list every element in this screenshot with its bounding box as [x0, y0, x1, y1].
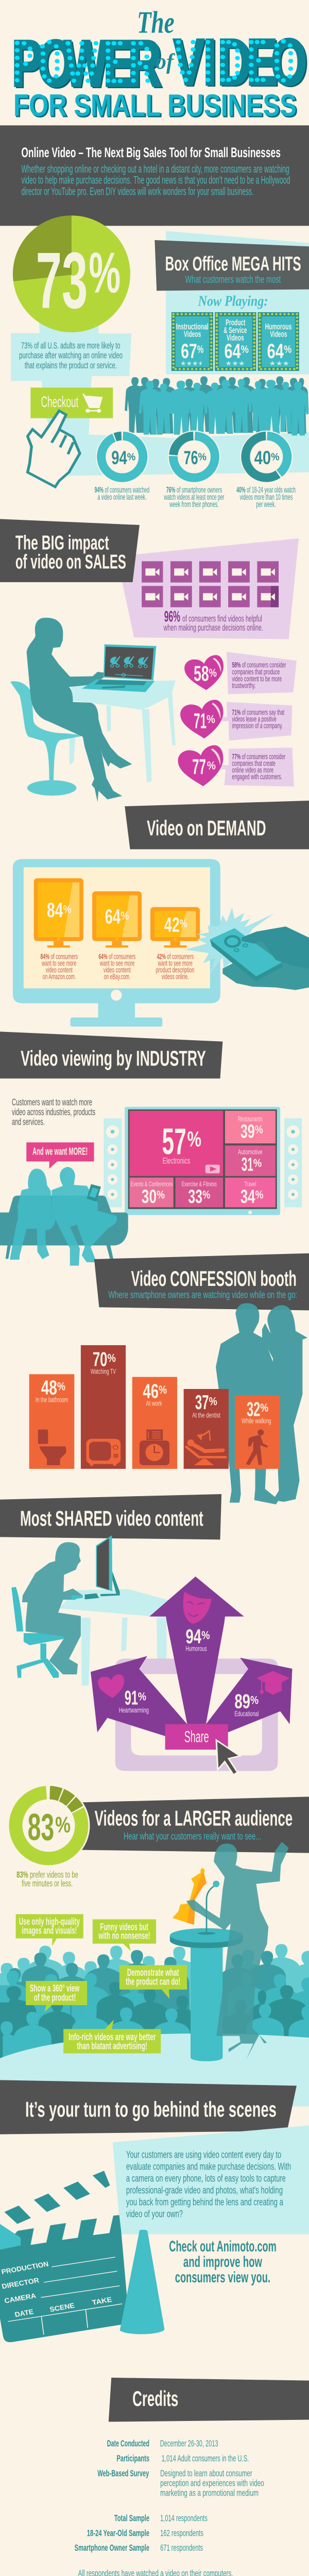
- illustration: hand holding remote: [210, 926, 309, 990]
- illustration: desktop monitor: [71, 1535, 120, 1599]
- chart: 94 percent donut: %: [127, 451, 135, 463]
- text: screen captions: 42% of consumers: [157, 953, 194, 961]
- title: The: The: [137, 5, 175, 39]
- cell: events 30 percent: 30: [142, 1186, 157, 1207]
- section: 73 percent and box office: [11, 215, 309, 487]
- heading: video confession booth: [94, 1253, 309, 1310]
- heading: the big impact: The BIG impact: [15, 531, 109, 554]
- callout: demonstrate product: the product can do!: [126, 1976, 180, 1987]
- button: share: [165, 1724, 228, 1750]
- chart: 42 percent screen: 42: [164, 913, 180, 937]
- icon: pixel hand pointer: [28, 411, 80, 487]
- illustration: woman silhouette: [27, 618, 132, 802]
- illustration: chair: [10, 681, 83, 795]
- icon: walking person: [246, 1429, 268, 1465]
- text: donut captions: 76% of smartphone owners: [166, 486, 222, 495]
- section: most shared: [0, 1494, 221, 1686]
- heading: credits: Credits: [132, 2386, 178, 2411]
- illustration: woman with award: [186, 1842, 289, 2059]
- section: trust hearts and video on demand: [13, 700, 309, 1027]
- chart: bar 32 percent while walking: [235, 1396, 280, 1469]
- chart: 64 percent screen: [92, 891, 142, 947]
- illustration: film clapperboard: TAKE: [91, 2296, 113, 2307]
- marquee: product and service videos: 64: [224, 340, 241, 363]
- chart: bar 37 percent at the dentist: 37: [195, 1391, 209, 1413]
- chart: 73 percent pie: 73: [36, 236, 88, 325]
- callout: info rich videos: [63, 2020, 161, 2054]
- chart: 84 percent screen: 84: [47, 899, 63, 922]
- stat: 58 percent heart: %: [209, 667, 217, 680]
- arrow: educational: [206, 1658, 292, 1732]
- cell: exercise 33 percent: [176, 1178, 223, 1207]
- stat: 58 percent heart: 58: [194, 662, 209, 686]
- table: survey labels: Total Sample: [114, 2513, 149, 2523]
- chart: 40 percent donut: [237, 428, 296, 486]
- callout: 360 view: Show a 360° view: [30, 1983, 80, 1994]
- heading: most shared video content: [0, 1494, 221, 1539]
- icon: light burst: [185, 908, 274, 974]
- stat: 71 percent heart: %: [207, 714, 215, 726]
- illustration: sofa: [0, 1196, 128, 1259]
- marquee: humorous videos: Videos: [270, 329, 287, 339]
- illustration: large monitor: [13, 859, 220, 1027]
- text: 73 percent description: that explains the product or service.: [25, 361, 117, 371]
- section: audience: [0, 1842, 309, 2113]
- text: customers want more: [12, 1097, 95, 1127]
- illustration: podium: [170, 1880, 243, 2061]
- text: 73 percent description: purchase after watching an online video: [19, 351, 123, 361]
- chart: 83 percent donut: 83: [28, 1806, 54, 1848]
- table: survey labels: [75, 2438, 149, 2553]
- table: survey labels: 18-24 Year-Old Sample: [87, 2528, 149, 2538]
- section: behind the scenes: [0, 2080, 309, 2342]
- marquee: product and service videos: [215, 312, 256, 371]
- chart: 40 percent donut: %: [271, 451, 280, 463]
- cell: automotive 31 percent: Automotive: [238, 1148, 263, 1156]
- text: check out animoto: [169, 2238, 277, 2286]
- chart: bar 48 percent bathroom: [29, 1374, 74, 1469]
- callout: and we want more: [26, 1142, 94, 1168]
- cell: travel 34 percent: Travel: [244, 1180, 256, 1188]
- icon: smartphone: [87, 1184, 101, 1201]
- text: screen captions: [40, 953, 194, 981]
- chart: 94 percent donut: [95, 430, 149, 484]
- stat: 77 percent heart: 77: [192, 755, 206, 779]
- heading: the big impact: of video on SALES: [15, 550, 126, 573]
- callout: and we want more: And we want MORE!: [32, 1146, 88, 1157]
- arrow: heartwarming: [91, 1656, 187, 1736]
- illustration: man at computer: [22, 1542, 83, 1674]
- table: survey labels: Date Conducted: [107, 2438, 149, 2448]
- marquee: humorous videos: ★★★: [269, 360, 289, 367]
- chart: 64 percent screen: 64: [105, 905, 121, 928]
- cell: restaurants 39 percent: 39: [241, 1121, 255, 1142]
- callout: funny videos: Funny videos but: [100, 1922, 148, 1933]
- marquee: instructional videos: 67: [181, 340, 197, 363]
- chart: 83 percent donut: [4, 1781, 93, 1870]
- text: screen captions: want to see more: [42, 959, 77, 968]
- cell: electronics 57 percent: %: [187, 1127, 201, 1151]
- cell: events 30 percent: %: [157, 1189, 165, 1201]
- marquee: instructional videos: %: [197, 343, 203, 355]
- chart: bar 70 percent watching tv: [81, 1345, 126, 1469]
- chart: 42 percent screen: [150, 907, 200, 947]
- heading: video on demand: [125, 801, 309, 849]
- chart: bar 46 percent at work: [132, 1377, 177, 1469]
- text: donut captions: [95, 486, 296, 509]
- title: POWER of VIDEO: [12, 26, 308, 101]
- marquee: instructional videos: Videos: [184, 329, 201, 339]
- illustration: couple on sofa: [10, 1167, 117, 1266]
- chart: bar 48 percent bathroom: 48: [41, 1376, 57, 1399]
- chart: bar 70 percent watching tv: Watching TV: [91, 1368, 116, 1376]
- cell: restaurants 39 percent: [225, 1111, 276, 1143]
- illustration: film clapperboard: [0, 2171, 128, 2342]
- stat: 58 percent heart: trustworthy.: [232, 682, 256, 690]
- cell: restaurants 39 percent: %: [255, 1124, 263, 1137]
- intro band: [0, 125, 309, 226]
- arrow: humorous: [149, 1577, 244, 1724]
- text: 73 percent description: 73% of all U.S. adults are more likely to: [21, 341, 120, 351]
- arrow: humorous: %: [201, 1630, 210, 1642]
- arrow: heartwarming: Heartwarming: [119, 1706, 149, 1715]
- chart: bar 32 percent while walking: 32: [247, 1398, 260, 1420]
- text: now playing: Now Playing:: [198, 293, 268, 309]
- callout: demonstrate product: [119, 1965, 187, 1998]
- callout: 360 view: [26, 1981, 87, 2012]
- heading: videos for a larger audience: [81, 1797, 309, 1853]
- cell: automotive 31 percent: 31: [242, 1154, 253, 1175]
- table: survey values: 162 respondents: [160, 2528, 203, 2538]
- cell: travel 34 percent: %: [255, 1189, 264, 1201]
- text: donut captions: a video online last week.: [97, 493, 146, 502]
- text: donut captions: week from their phones.: [169, 500, 219, 509]
- illustration: audience crowd: [0, 1944, 309, 2113]
- chart: bar 32 percent while walking: %: [260, 1402, 268, 1415]
- marquee: humorous videos: 64: [267, 340, 284, 363]
- illustration: trophy: [173, 1868, 207, 1925]
- illustration: film clapperboard: CAMERA: [4, 2292, 37, 2305]
- heading: credits: [109, 2378, 309, 2422]
- marquee: product and service videos: & Service: [224, 326, 247, 335]
- marquee: instructional videos: Instructional: [176, 321, 209, 331]
- text: 83 percent caption: 83% prefer videos to be: [16, 1870, 78, 1880]
- heading: box office mega hits: [154, 240, 309, 291]
- illustration: spotlight cone: [120, 2230, 165, 2334]
- table: survey labels: Smartphone Owner Sample: [75, 2543, 149, 2553]
- cell: electronics 57 percent: 57: [162, 1121, 186, 1162]
- chart: bar 46 percent at work: %: [159, 1384, 167, 1397]
- illustration: speakers: [104, 1118, 302, 1207]
- chart: bar 32 percent while walking: While walking: [242, 1417, 271, 1425]
- text: screen captions: on eBay.com.: [104, 973, 130, 981]
- section: couple on sofa and confession booth: [0, 1167, 309, 1504]
- cell: automotive 31 percent: %: [253, 1157, 262, 1170]
- callout: 360 view: of the product!: [34, 1992, 76, 2003]
- text: donut captions: per week.: [256, 500, 276, 509]
- title: POWER of VIDEO: POWER: [12, 28, 161, 100]
- stat: 77 percent heart: %: [207, 760, 216, 772]
- marquee: instructional videos: [171, 312, 213, 371]
- chart: 42 percent screen: %: [180, 918, 187, 930]
- cell: travel 34 percent: 34: [241, 1186, 255, 1207]
- stat: 58 percent heart: [184, 652, 297, 694]
- illustration: film clapperboard: PRODUCTION: [1, 2260, 49, 2276]
- button: share: Share: [184, 1728, 209, 1746]
- section: credits: [75, 2378, 309, 2553]
- chart: 76 percent donut: 76: [184, 447, 198, 468]
- cell: events 30 percent: Events & Conferences: [130, 1180, 173, 1188]
- arrow: humorous: 94: [185, 1625, 201, 1648]
- marquee: humorous videos: %: [284, 343, 292, 355]
- chart: 76 percent donut: [168, 431, 220, 483]
- table: survey labels: Web-Based Survey: [97, 2468, 149, 2478]
- table: survey values: 1,014 respondents: [160, 2513, 208, 2523]
- chart: 64 percent screen: %: [121, 910, 129, 923]
- cell: events 30 percent: [129, 1178, 174, 1207]
- marquee: product and service videos: Product: [226, 318, 245, 327]
- table: survey values: 671 respondents: [160, 2543, 203, 2553]
- icon: mouse cursor: [216, 1740, 240, 1775]
- arrow: educational: 89: [234, 1690, 250, 1713]
- icon: graduation cap: [256, 1671, 289, 1694]
- illustration: film clapperboard: SCENE: [49, 2302, 75, 2314]
- title: of: of: [156, 49, 176, 74]
- chart: 76 percent donut: %: [198, 451, 207, 463]
- chart: bar 48 percent bathroom: In the bathroom: [36, 1396, 68, 1404]
- marquee: product and service videos: Videos: [227, 333, 244, 343]
- text: screen captions: video content: [104, 966, 131, 974]
- section: remote and industry: [0, 908, 309, 1215]
- text: 83 percent caption: five minutes or less.: [22, 1878, 73, 1889]
- icon: comedy mask: [183, 1591, 212, 1624]
- header section: [0, 5, 309, 226]
- cell: exercise 33 percent: Exercise & Fitness: [182, 1180, 217, 1188]
- icon: shopping cart: [83, 394, 101, 412]
- button: checkout: [30, 387, 113, 418]
- panel: light blue backdrop: [11, 231, 309, 476]
- text: screen captions: video content: [46, 966, 73, 974]
- illustration: laptop with strollers: [82, 645, 156, 692]
- chart: bar 46 percent at work: At work: [146, 1399, 162, 1408]
- chart: 83 percent donut: %: [55, 1812, 71, 1837]
- callout: info rich videos: Info-rich videos are way better: [68, 2031, 156, 2043]
- callout: funny videos: [93, 1919, 156, 1951]
- section: big impact on sales: [0, 486, 299, 802]
- stat: 77 percent heart: [178, 745, 294, 787]
- panel: call to create: video of your own?: [126, 2209, 183, 2219]
- arrow: heartwarming: %: [138, 1691, 146, 1703]
- chart: bar 70 percent watching tv: %: [108, 1352, 116, 1365]
- panel: 96 percent: [122, 538, 299, 639]
- chart: bar 37 percent at the dentist: [184, 1389, 229, 1469]
- icon: toilet: [38, 1430, 66, 1465]
- arrow: humorous: Humorous: [185, 1645, 207, 1653]
- intro paragraph: [21, 162, 290, 197]
- text: screen captions: want to see more: [99, 959, 134, 968]
- illustration: desk: [70, 681, 176, 783]
- callout: demonstrate product: Demonstrate what: [127, 1967, 179, 1978]
- cell: electronics 57 percent: Electronics: [163, 1156, 190, 1165]
- chart: 84 percent screen: [34, 878, 83, 947]
- chart: bar 37 percent at the dentist: %: [209, 1396, 217, 1408]
- icon: heart: [98, 1674, 124, 1698]
- illustration: crowd of customers: [125, 376, 308, 435]
- chart: 84 percent screen: %: [63, 904, 72, 916]
- heading: your turn: [0, 2080, 297, 2134]
- chart: bar 48 percent bathroom: %: [57, 1381, 65, 1393]
- stat: 71 percent heart: 71: [194, 708, 207, 733]
- text: customers want more: video across industries, products: [12, 1107, 95, 1117]
- text: 73 percent description: [19, 341, 123, 371]
- marquee: product and service videos: ★★★: [225, 360, 245, 367]
- table: survey values: December 26-30, 2013: [160, 2438, 218, 2448]
- icon: television: [87, 1439, 121, 1466]
- button: checkout: Checkout: [41, 393, 78, 411]
- title: POWER of VIDEO: VIDEO: [174, 26, 307, 99]
- title: POWER of VIDEO: VIDEO: [175, 28, 308, 100]
- cell: restaurants 39 percent: Restaurants: [238, 1115, 263, 1123]
- table: survey labels: Participants: [117, 2453, 149, 2463]
- icon: time clock: [140, 1430, 169, 1465]
- cell: travel 34 percent: [225, 1178, 276, 1207]
- illustration: whispering couple: [216, 1303, 307, 1504]
- text: customers want more: and services.: [12, 1117, 45, 1127]
- chart: bar 46 percent at work: 46: [143, 1380, 159, 1402]
- marquee: instructional videos: ★★★★: [180, 360, 204, 367]
- cell: exercise 33 percent: %: [202, 1189, 210, 1201]
- icon: dentist chair: [186, 1430, 226, 1465]
- cell: exercise 33 percent: 33: [188, 1186, 202, 1207]
- cell: automotive 31 percent: [225, 1145, 276, 1176]
- text: screen captions: on Amazon.com.: [43, 973, 76, 981]
- illustration: film clapperboard: DIRECTOR: [1, 2277, 40, 2291]
- section: shared arrows and larger audience: [4, 1577, 309, 1870]
- table: survey values: [160, 2438, 264, 2553]
- text: donut captions: watch videos at least once per: [164, 493, 225, 502]
- marquee: product and service videos: %: [241, 343, 249, 355]
- text: screen captions: product description: [156, 966, 194, 974]
- callout: high quality visuals: [16, 1914, 83, 1946]
- title: POWER of VIDEO: POWER: [13, 29, 163, 101]
- callout: info rich videos: than blatant advertising!: [77, 2041, 147, 2052]
- text: screen captions: want to see more: [158, 959, 193, 968]
- chart: 40 percent donut: 40: [254, 447, 271, 468]
- panel: share frame: [115, 1658, 278, 1771]
- illustration: computer desk: [59, 1589, 169, 1686]
- icons: camera grid: [142, 561, 279, 607]
- text: 96 percent statement: [163, 608, 263, 633]
- text: screen captions: 64% of consumers: [98, 953, 135, 961]
- illustration: office chair: [11, 1587, 67, 1678]
- marquee: humorous videos: [258, 312, 299, 371]
- chart: 94 percent donut: 94: [111, 447, 127, 468]
- stat: 71 percent heart: [180, 700, 292, 740]
- chart: bar 70 percent watching tv: 70: [93, 1348, 108, 1370]
- heading: video viewing by industry: [0, 1031, 222, 1078]
- illustration: stage: [0, 2033, 309, 2106]
- text: 83 percent caption: [16, 1870, 78, 1889]
- text: screen captions: 84% of consumers: [40, 953, 78, 961]
- arrow: educational: Educational: [234, 1710, 259, 1718]
- panel: call to create: [113, 2126, 309, 2234]
- text: 96 percent statement: 96%: [164, 608, 180, 625]
- text: donut captions: 94% of consumers watched: [95, 486, 149, 495]
- arrow: heartwarming: 91: [125, 1686, 138, 1709]
- chart: bar 37 percent at the dentist: At the dentist: [192, 1412, 220, 1419]
- callout: high quality visuals: Use only high-quality: [19, 1916, 80, 1927]
- text: customers want more: Customers want to watch more: [12, 1097, 92, 1108]
- chart: industry treemap on tv: [125, 1107, 280, 1215]
- cell: electronics 57 percent: [129, 1111, 223, 1176]
- arrow: educational: %: [250, 1694, 259, 1707]
- text: screen captions: videos online.: [162, 973, 189, 981]
- chart: 73 percent pie: %: [89, 241, 121, 304]
- illustration: film clapperboard: DATE: [14, 2308, 35, 2319]
- callout: funny videos: with no nonsense!: [98, 1930, 150, 1941]
- chart: 73 percent pie: [13, 215, 130, 332]
- callout: high quality visuals: images and visuals!: [22, 1925, 77, 1936]
- heading: the big impact: [0, 519, 140, 582]
- icon: play button: [205, 1165, 220, 1173]
